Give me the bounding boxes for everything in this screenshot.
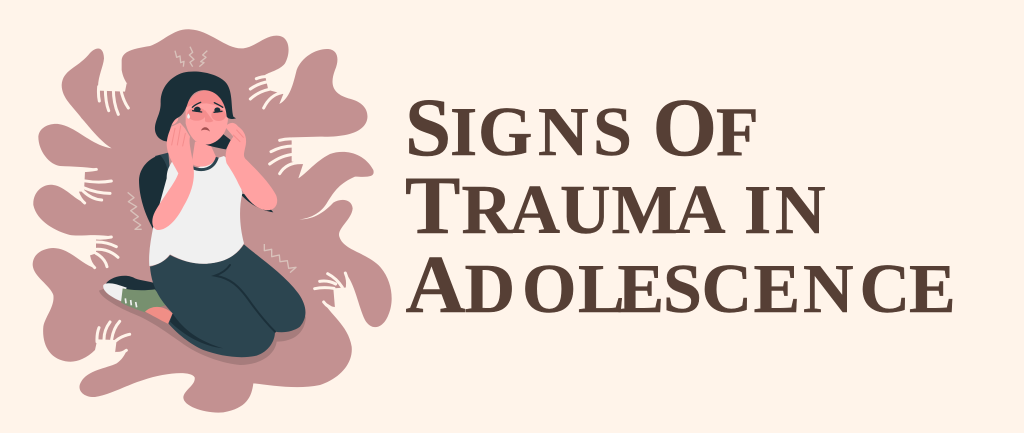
figure: face bbox=[163, 90, 228, 145]
title line 3: A bbox=[406, 238, 466, 330]
fingers: left lower hand bbox=[89, 237, 118, 268]
figure: T-shirt bbox=[149, 156, 244, 266]
title line 2: IN bbox=[744, 172, 826, 249]
figure: eyes, brows, tear and mouth bbox=[187, 102, 223, 132]
figure: hair back bbox=[202, 132, 231, 149]
title line 2: T bbox=[405, 159, 460, 251]
figure: neck and collar bbox=[192, 142, 217, 170]
figure: trousers bbox=[150, 244, 305, 357]
fingers: upper right hand bbox=[250, 77, 282, 108]
illustration: distressed teenager surrounded by reaching hands bbox=[33, 29, 392, 413]
title line 1: O bbox=[652, 81, 717, 173]
background blob with hand cut-outs bbox=[33, 29, 392, 413]
figure: hair front bbox=[155, 71, 236, 142]
squiggle marks bbox=[128, 47, 296, 273]
title line 3: DOLESCENCE bbox=[464, 251, 956, 328]
title line 2: RAUMA bbox=[462, 172, 726, 249]
fingers: top left hand bbox=[98, 87, 128, 114]
ground shadow bbox=[99, 287, 306, 365]
title bbox=[405, 81, 956, 330]
title line 1: S bbox=[405, 81, 451, 173]
fingers: right hand bbox=[270, 139, 303, 174]
figure: right arm and hand bbox=[225, 123, 277, 210]
fingers: left upper hand bbox=[77, 169, 111, 203]
title line 1: F bbox=[716, 94, 759, 171]
fingers: lower right hand bbox=[315, 273, 348, 308]
fingers: bottom left hand bbox=[97, 321, 130, 353]
figure: left arm and hand bbox=[152, 123, 194, 230]
figure: backpack and sleeves bbox=[139, 153, 273, 229]
title line 1: IGNS bbox=[450, 94, 632, 171]
reaching hands: fingers bbox=[77, 77, 348, 353]
figure: shoe and foot bbox=[103, 276, 173, 324]
